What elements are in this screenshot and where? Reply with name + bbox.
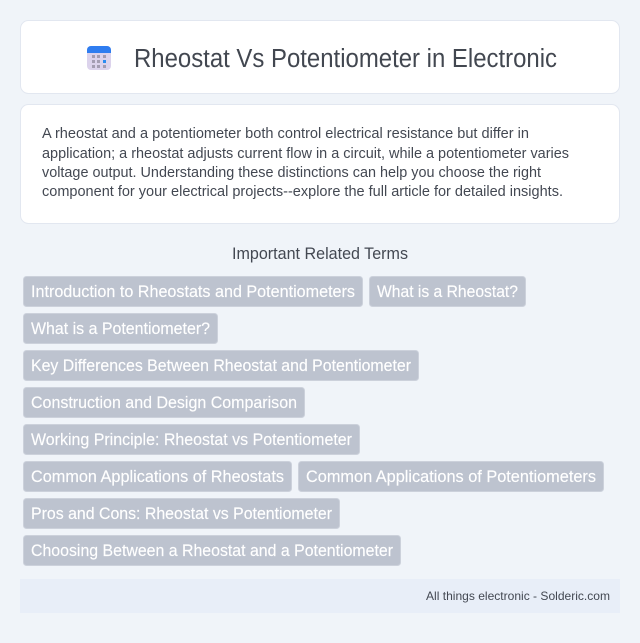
chip: applications of potentiometers [298, 462, 604, 492]
intro text [42, 125, 569, 200]
intro text: voltage output. Understanding these distinctions can help you choose the right [42, 164, 542, 181]
chip: applications of potentiometers: Common Applications of Potentiometers [306, 468, 596, 486]
chip: construction: Construction and Design Comparison [31, 394, 297, 412]
chip: choosing: Choosing Between a Rheostat and a Potentiometer [31, 542, 393, 560]
chip: choosing [24, 536, 400, 566]
chip: what is a potentiometer [24, 314, 218, 344]
header panel [20, 20, 620, 94]
chip: what is a rheostat: What is a Rheostat? [377, 283, 518, 301]
footer [20, 579, 620, 613]
chip: key differences: Key Differences Between Rheostat and Potentiometer [31, 357, 411, 375]
footer text: All things electronic - Solderic.com [426, 589, 610, 603]
chip: what is a rheostat [370, 276, 526, 306]
icon: calendar [87, 46, 111, 70]
chip: pros and cons: Pros and Cons: Rheostat vs Potentiometer [31, 505, 332, 523]
chip: introduction [24, 276, 362, 306]
chip: working principle: Working Principle: Rheostat vs Potentiometer [31, 431, 352, 449]
chip: applications of rheostats [24, 462, 292, 492]
chip: what is a potentiometer: What is a Potentiometer? [31, 320, 210, 338]
chip: applications of rheostats: Common Applications of Rheostats [31, 468, 284, 486]
intro text: component for your electrical projects--explore the full article for detailed insights. [42, 183, 563, 200]
intro text: A rheostat and a potentiometer both control electrical resistance but differ in [42, 125, 529, 142]
intro text: application; a rheostat adjusts current flow in a circuit, while a potentiometer varies [42, 145, 569, 162]
chip: construction [24, 388, 304, 418]
intro panel [20, 104, 620, 224]
chip: working principle [24, 424, 360, 454]
term chips [24, 276, 604, 566]
chip: key differences [24, 350, 418, 380]
chip: introduction: Introduction to Rheostats and Potentiometers [31, 283, 355, 301]
title: Rheostat Vs Potentiometer in Electronic [134, 45, 557, 73]
section heading: Important Related Terms [232, 245, 408, 263]
chip: pros and cons [24, 498, 340, 528]
